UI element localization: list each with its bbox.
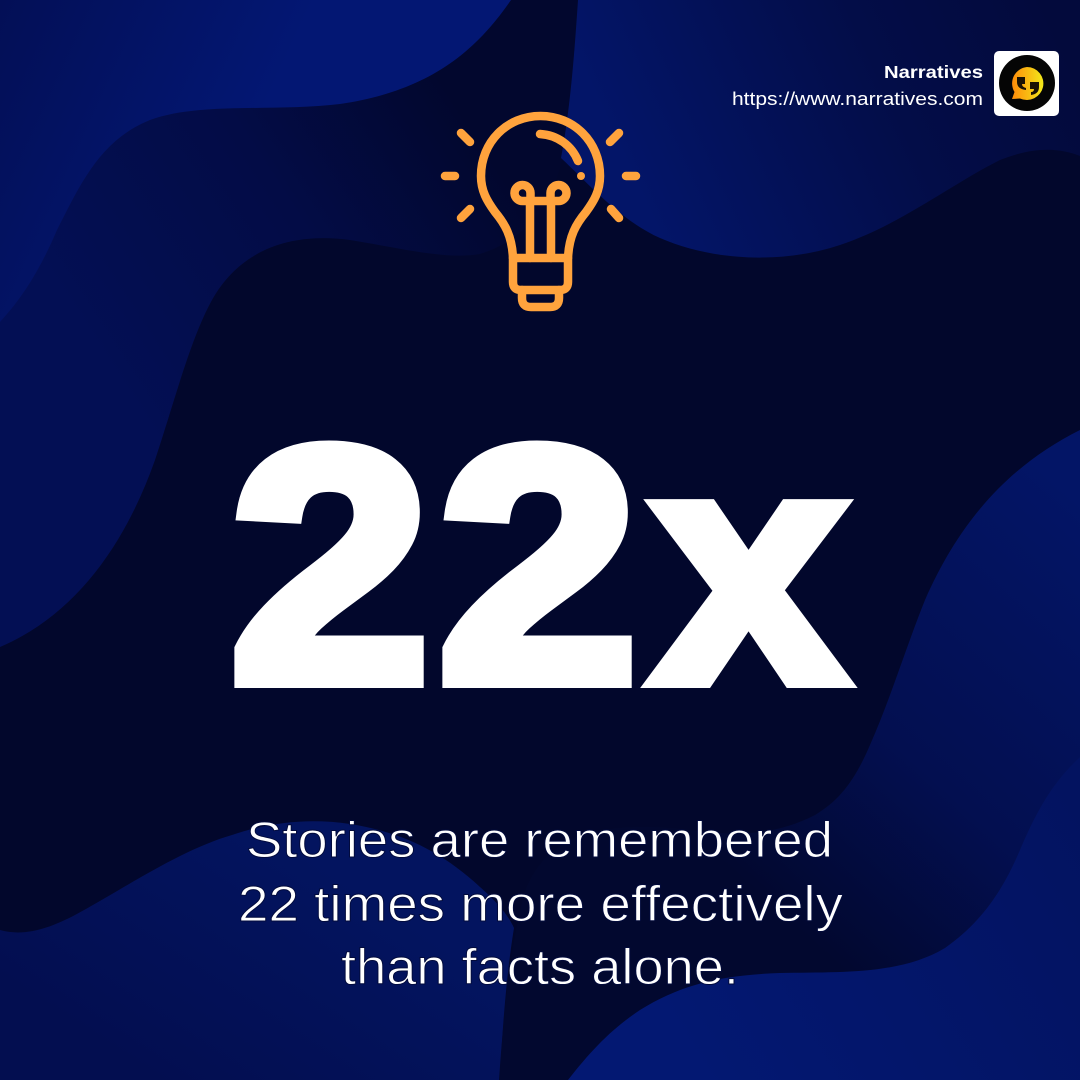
logo quote marks xyxy=(1017,77,1039,95)
logo black disc xyxy=(999,55,1055,111)
logo speech bubble xyxy=(1012,67,1043,100)
description text: than facts alone. xyxy=(341,939,739,995)
bulb cap xyxy=(522,290,559,307)
bulb highlight dot xyxy=(577,172,585,180)
description text xyxy=(238,812,843,995)
bulb screw base xyxy=(513,258,568,290)
logo xyxy=(994,51,1059,116)
bulb filament xyxy=(515,185,566,258)
brand name: Narratives xyxy=(884,62,983,82)
big number 22x: 2 xyxy=(438,380,638,752)
bulb highlight arc xyxy=(540,134,578,161)
description text: Stories are remembered xyxy=(246,812,833,868)
background wave: bottom right bright layer xyxy=(568,757,1080,1080)
brand url: https://www.narratives.com xyxy=(732,89,983,109)
logo white tile xyxy=(994,51,1059,116)
background wave: bottom left layer xyxy=(0,821,514,1080)
background wave: bottom right layer xyxy=(499,430,1080,1080)
light rays xyxy=(445,133,636,218)
big number 22x xyxy=(230,380,847,752)
description text: 22 times more effectively xyxy=(238,876,843,932)
big number 22x: x xyxy=(653,382,847,750)
big number 22x: 2 xyxy=(230,380,430,752)
icon: light bulb xyxy=(445,116,636,307)
background wave: top left middle layer xyxy=(0,0,578,647)
background wave: top right layer xyxy=(561,0,1080,258)
bulb glass outline xyxy=(481,116,600,258)
background wave: top left bright layer xyxy=(0,0,511,322)
